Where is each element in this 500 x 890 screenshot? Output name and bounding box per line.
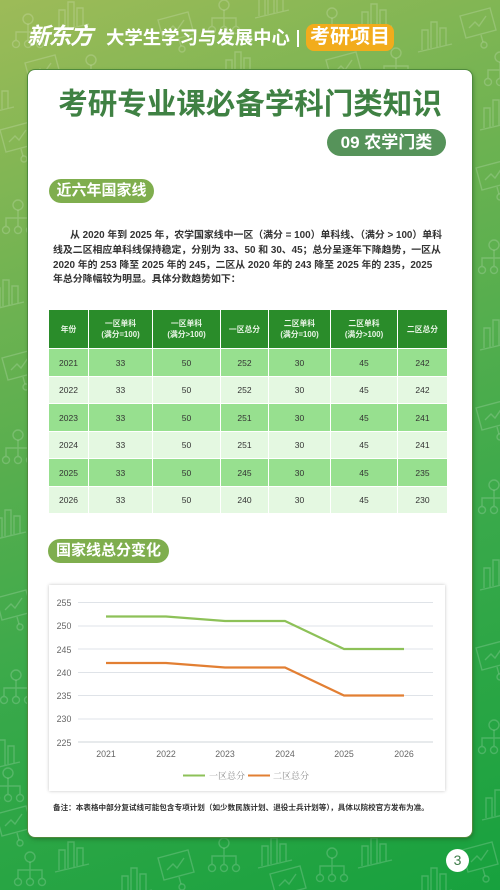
table: national score lines: 45 — [359, 440, 369, 450]
header separator — [297, 30, 299, 47]
y axis labels: 255 — [57, 598, 71, 608]
legend: 二区总分 — [273, 770, 309, 781]
table: national score lines: (满分>100) — [167, 330, 206, 339]
heading: recent national lines: 近六年国家线 — [56, 182, 146, 199]
intro paragraph: 2020 年的 253 降至 2025 年的 245，二区从 2020 年的 243 降至 2025 年的 235，2025 — [53, 260, 432, 271]
table: national score lines: 2026 — [59, 495, 78, 505]
table: national score lines: 33 — [116, 468, 125, 478]
table: national score lines: 二区单科 — [348, 319, 380, 328]
table: national score lines: 二区单科 — [284, 319, 315, 328]
table: national score lines: 45 — [359, 468, 369, 478]
table: national score lines: 2022 — [59, 385, 78, 395]
x axis labels: 2022 — [156, 749, 176, 759]
page number — [446, 849, 469, 872]
table: national score lines: (满分=100) — [280, 330, 319, 339]
table: national score lines: 252 — [237, 385, 252, 395]
intro paragraph — [53, 230, 442, 285]
series: zone one total — [106, 616, 404, 649]
x axis labels: 2023 — [215, 749, 235, 759]
legend — [183, 770, 309, 781]
page number: 3 — [454, 852, 461, 868]
y axis labels: 235 — [57, 691, 71, 701]
table: national score lines: 242 — [415, 358, 430, 368]
table: national score lines: 50 — [182, 440, 191, 450]
table: national score lines: 252 — [237, 358, 252, 368]
table: national score lines: 251 — [237, 412, 252, 422]
table: national score lines: 二区总分 — [407, 324, 438, 334]
table: national score lines: 年份 — [61, 324, 76, 334]
table: national score lines: 242 — [415, 385, 430, 395]
table: national score lines: 33 — [116, 385, 125, 395]
y axis labels: 230 — [57, 714, 71, 724]
table: national score lines: 230 — [415, 495, 430, 505]
table: national score lines: 2025 — [59, 468, 78, 478]
table: national score lines: 245 — [237, 468, 252, 478]
table: national score lines: 2021 — [59, 358, 78, 368]
table: national score lines: 241 — [415, 440, 430, 450]
table: national score lines: (满分>100) — [345, 330, 383, 339]
table: national score lines — [49, 310, 447, 513]
intro paragraph: 从 2020 年到 2025 年，农学国家线中一区（满分 = 100）单科线、（满分 > 100）单科 — [70, 230, 442, 241]
header badge: 考研项目 — [310, 26, 390, 48]
table: national score lines: 45 — [359, 495, 369, 505]
table: national score lines: 30 — [295, 495, 304, 505]
table: national score lines: 251 — [237, 440, 252, 450]
table: national score lines: 240 — [237, 495, 252, 505]
table: national score lines: 241 — [415, 412, 430, 422]
table: national score lines: 一区单科 — [171, 319, 202, 328]
table: national score lines: 50 — [182, 358, 191, 368]
intro paragraph: 年总分降幅较为明显。具体分数趋势如下： — [53, 274, 241, 285]
y axis labels: 245 — [57, 645, 71, 655]
x axis labels: 2025 — [334, 749, 354, 759]
table: national score lines: 50 — [182, 495, 191, 505]
table: national score lines: 45 — [359, 412, 369, 422]
table: national score lines: 30 — [295, 385, 304, 395]
table: national score lines: 30 — [295, 468, 304, 478]
y axis labels — [57, 598, 71, 748]
table: national score lines: 一区单科 — [105, 319, 136, 328]
y axis labels: 240 — [57, 668, 71, 678]
table: national score lines: 33 — [116, 440, 125, 450]
heading: recent national lines — [49, 179, 154, 203]
heading: total score trend: 国家线总分变化 — [56, 542, 161, 559]
subject badge: 09 农学门类 — [341, 133, 432, 152]
table: national score lines: 一区总分 — [229, 324, 260, 334]
x axis labels: 2021 — [96, 749, 116, 759]
y axis labels: 225 — [57, 738, 71, 748]
table: national score lines: 50 — [182, 468, 191, 478]
table: national score lines: 33 — [116, 412, 125, 422]
intro paragraph: 线及二区相应单科线保持稳定，分别为 33、50 和 30、45；总分呈逐年下降趋势，一区从 — [53, 245, 441, 256]
subject badge — [327, 129, 446, 156]
line chart: total score trend — [47, 583, 447, 793]
table: national score lines: (满分=100) — [101, 330, 140, 339]
table: national score lines: 33 — [116, 495, 125, 505]
table: national score lines: 235 — [415, 468, 430, 478]
header organisation name: 大学生学习与发展中心 — [106, 27, 290, 48]
footnote: 备注：本表格中部分复试线可能包含专项计划（如少数民族计划、退役士兵计划等），具体以院校官方发布为准。 — [53, 803, 429, 812]
table: national score lines: 2024 — [59, 440, 78, 450]
title: 考研专业课必备学科门类知识 — [58, 88, 442, 121]
heading: total score trend — [48, 539, 169, 563]
y axis labels: 250 — [57, 621, 71, 631]
table: national score lines: 30 — [295, 440, 304, 450]
table: national score lines: 2023 — [59, 412, 78, 422]
table: national score lines: 45 — [359, 358, 369, 368]
table: national score lines: 50 — [182, 412, 191, 422]
header brand logo: 新东方 — [27, 23, 92, 49]
table: national score lines: 30 — [295, 412, 304, 422]
x axis labels — [96, 749, 414, 759]
table: national score lines: 45 — [359, 385, 369, 395]
x axis labels: 2024 — [275, 749, 295, 759]
table: national score lines: 50 — [182, 385, 191, 395]
table: national score lines: 30 — [295, 358, 304, 368]
x axis labels: 2026 — [394, 749, 414, 759]
main white panel — [28, 70, 472, 837]
series: zone two total — [106, 663, 404, 696]
legend: 一区总分 — [209, 770, 245, 781]
table: national score lines: 33 — [116, 358, 125, 368]
